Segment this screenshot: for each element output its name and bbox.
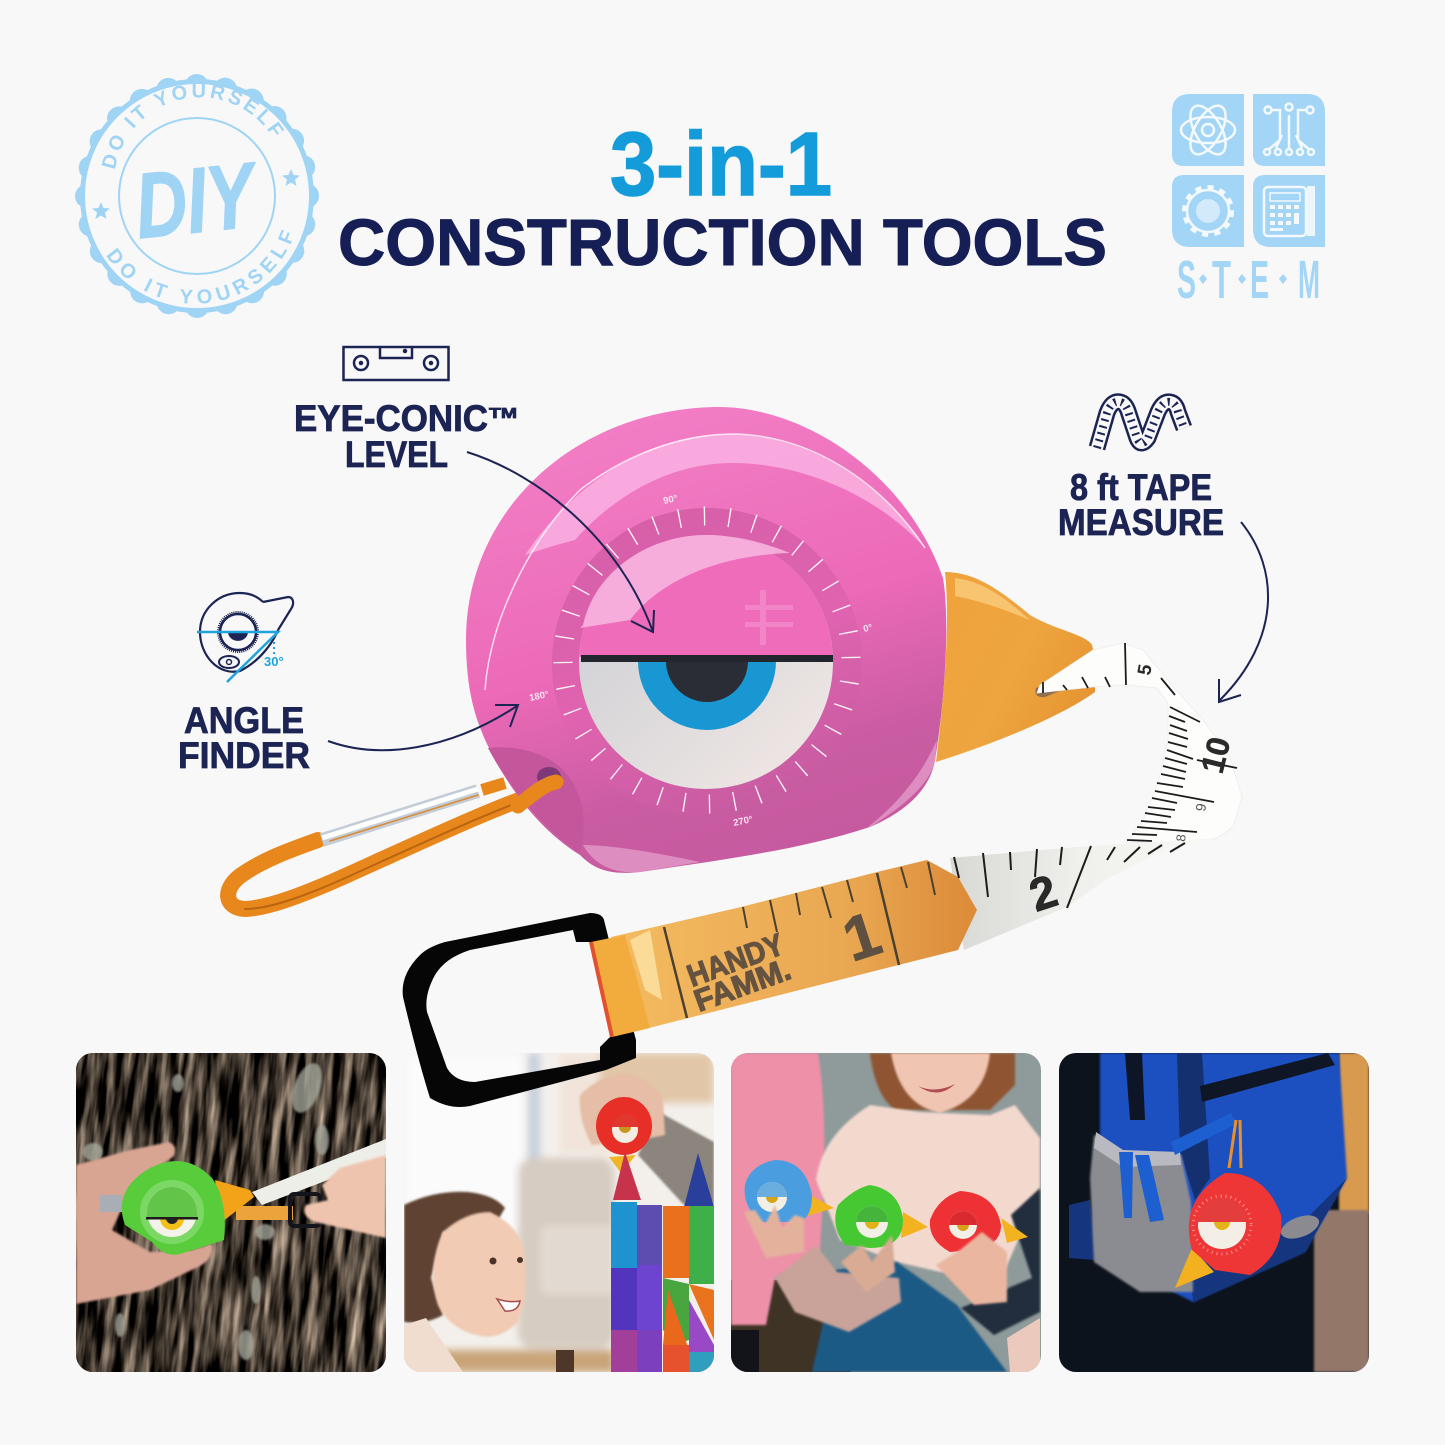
carabiner notch	[488, 747, 584, 853]
coat lower and sleeves	[812, 1262, 1007, 1372]
measuring tape	[611, 643, 1242, 1032]
STEM badge	[1172, 94, 1325, 310]
left hand	[76, 1142, 212, 1304]
tape numbers: 9	[1192, 802, 1209, 813]
lower glossy edges	[583, 845, 700, 872]
black tape handle	[403, 913, 662, 1107]
title: 3-in-1: 3-in-1	[610, 115, 832, 215]
label: angle finder	[178, 700, 310, 776]
orange ribbon	[611, 860, 977, 1032]
DIY stamp badge: DO IT YOURSELF	[106, 230, 292, 304]
green tape measure	[122, 1161, 254, 1255]
blue tape measure	[745, 1160, 834, 1222]
icon: angle finder: 30°	[264, 654, 284, 669]
STEM badge: M	[1298, 250, 1320, 310]
label: eye-conic level: LEVEL	[345, 434, 448, 475]
title: construction tools: CONSTRUCTION TOOLS	[338, 205, 1107, 279]
label: eye-conic level: TM	[489, 405, 517, 422]
girl hair and face	[404, 1192, 505, 1323]
dial degree labels: 270°	[732, 814, 754, 829]
label: eye-conic level: EYE-CONIC	[294, 398, 488, 439]
tape numbers: 8	[1173, 834, 1189, 842]
tape numbers: 5	[1134, 662, 1157, 677]
icon: tape ribbon	[1097, 402, 1184, 448]
label: angle finder: FINDER	[178, 735, 310, 776]
label: eye-conic level	[294, 398, 517, 475]
DIY stamp badge	[75, 74, 319, 318]
photo: tree bark measurement	[76, 1053, 386, 1372]
icon: angle finder	[197, 593, 293, 682]
brand: handy famm: HANDY	[682, 926, 789, 994]
tape numbers	[1023, 662, 1237, 922]
photo: children holding three tape measures	[731, 1053, 1041, 1372]
girl coat	[816, 1105, 1040, 1272]
front white ribbon	[950, 838, 1217, 950]
child hands	[744, 1205, 1007, 1305]
eye	[579, 535, 833, 789]
mesh pocket	[1090, 1135, 1193, 1292]
arrow: tape pointer	[1219, 522, 1268, 702]
photo: tape measure clipped to backpack	[1059, 1053, 1369, 1372]
tape ribbon across tree	[252, 1139, 386, 1205]
red tape measure	[1175, 1173, 1281, 1288]
STEM lettering	[1177, 250, 1320, 310]
dial ring	[552, 508, 862, 818]
back ribbon	[1037, 643, 1242, 843]
photo: girl with magnetic tiles	[404, 1053, 714, 1372]
icon: calculator tile	[1253, 175, 1325, 247]
dial degree labels: 180°	[528, 689, 550, 704]
dial degree labels: 90°	[662, 493, 679, 507]
measuring tape: 1	[835, 899, 889, 975]
icon: gear tile	[1172, 175, 1244, 247]
arrow: angle finder pointer	[328, 705, 518, 750]
right hand	[304, 1155, 386, 1238]
tape numbers: 10	[1194, 733, 1237, 777]
brand: handy famm	[682, 926, 795, 1019]
zipper pulls	[1119, 1113, 1236, 1222]
pink tape measure body	[466, 407, 946, 873]
ticks	[664, 862, 935, 1018]
brand: handy famm: FAMM.	[689, 951, 795, 1019]
red tape measure	[930, 1191, 1028, 1252]
dial degree labels	[528, 493, 874, 829]
adult arm and hand with red tape measure	[638, 1112, 714, 1205]
label: 8 ft tape measure: MEASURE	[1058, 502, 1224, 543]
label: angle finder: ANGLE	[184, 700, 304, 741]
arrow: level pointer	[467, 452, 654, 632]
hair and face	[870, 1053, 1015, 1110]
dial ticks	[561, 514, 853, 806]
icon: circuit tile	[1253, 94, 1325, 166]
top highlight crescent	[525, 434, 925, 555]
orange beak	[936, 572, 1095, 762]
tape numbers: 2	[1023, 864, 1063, 922]
DIY stamp badge: DIY	[131, 144, 264, 258]
STEM lettering: E	[1250, 250, 1269, 310]
green tape measure	[835, 1185, 928, 1248]
carabiner clip	[228, 783, 553, 909]
STEM lettering: T	[1212, 250, 1231, 310]
STEM lettering: S	[1177, 250, 1196, 310]
label: 8 ft tape measure	[1058, 467, 1224, 543]
dial degree labels: 0°	[862, 622, 874, 635]
icon: atom tile	[1172, 94, 1244, 166]
DIY stamp badge: DO IT YOURSELF	[102, 84, 284, 169]
icon: spirit level	[344, 347, 448, 380]
pink jacket	[731, 1053, 824, 1325]
blue backpack	[1090, 1053, 1347, 1302]
magnetic tile tower	[611, 1152, 714, 1372]
label: 8 ft tape measure: 8 ft TAPE	[1070, 467, 1212, 508]
